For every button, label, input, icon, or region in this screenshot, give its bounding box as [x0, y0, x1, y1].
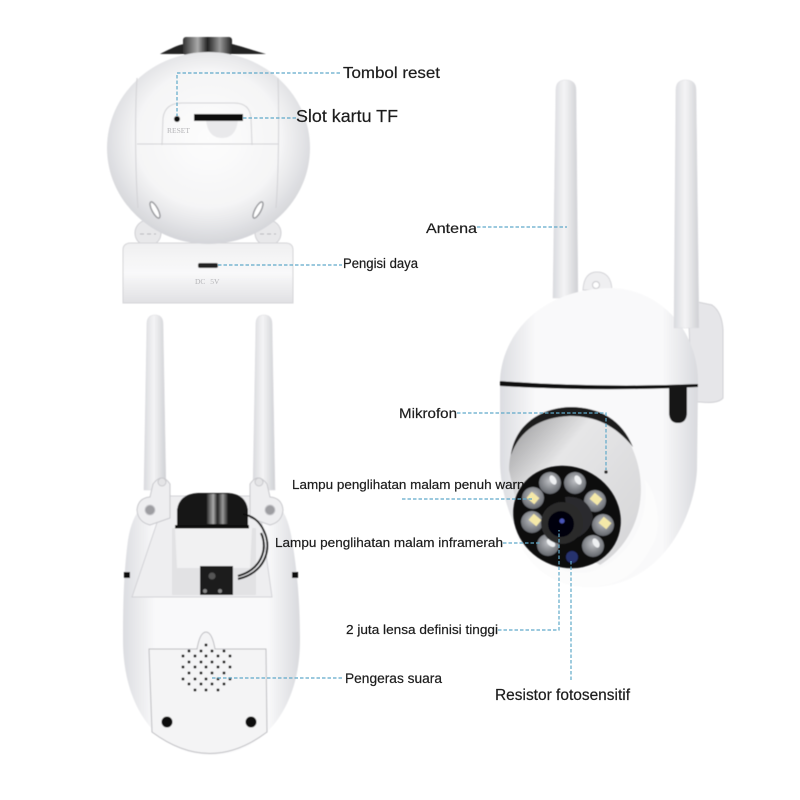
side bracket: [688, 300, 723, 402]
camera: lens face: [494, 446, 640, 588]
cable: [238, 514, 267, 579]
label over housing: full colour night lamp: Lampu penglihatan malam penuh warna: [292, 478, 532, 492]
leader: full colour night lamp: [402, 498, 532, 500]
antenna hinges: [137, 478, 283, 525]
callout: reset button: [177, 65, 441, 116]
lens faceplate: [494, 446, 640, 588]
camera lens: [541, 497, 593, 544]
voltage label: DC 5V: [195, 277, 220, 286]
camera: front housing: [500, 80, 723, 587]
central recess: [132, 496, 272, 597]
charging base: [123, 243, 293, 303]
TF card slot: [194, 114, 243, 121]
gimbal and stem: [175, 493, 252, 568]
gimbal recess: [509, 407, 641, 565]
rotating head highlight: [514, 480, 658, 587]
vent slots: [148, 201, 265, 219]
notch: [669, 386, 687, 423]
right antenna: [674, 80, 699, 328]
speaker holes: [183, 645, 230, 690]
panel seams: [136, 78, 279, 208]
reset hole: [174, 116, 180, 122]
callout: infrared night lamp: Lampu penglihatan malam inframerah: [275, 536, 503, 550]
left antenna: [553, 80, 578, 298]
finger hole: [206, 120, 238, 138]
reset label: RESET: [167, 126, 190, 135]
micro USB port: [198, 263, 218, 268]
callout: speaker: Pengeras suara: [345, 671, 442, 686]
callout: microphone: Mikrofon: [399, 405, 457, 421]
callout: antenna: Antena: [426, 220, 477, 236]
microphone hole: [604, 470, 608, 474]
rear body: [123, 496, 300, 755]
callout: high definition lens: [346, 530, 559, 637]
camera: top rear view: [107, 37, 310, 303]
photoresistor: [566, 551, 578, 563]
hanging hook: [583, 272, 612, 290]
main housing: [500, 288, 698, 587]
speaker hatch: [149, 632, 267, 754]
side marks: [124, 572, 298, 578]
LED lamps: [521, 472, 614, 557]
power module: [200, 566, 233, 595]
recess shadow: [511, 407, 633, 455]
callout: photoresistor: Resistor fotosensitif: [495, 687, 631, 704]
rear antennas: [144, 315, 275, 490]
callout: reset button: Tombol reset: [343, 65, 441, 82]
screws: [162, 716, 256, 728]
lens stem: [160, 37, 266, 55]
infrared LED glints: [545, 474, 601, 549]
callout: TF card slot: Slot kartu TF: [296, 106, 398, 126]
hook hole: [592, 282, 600, 288]
camera: lower rear view: [123, 315, 300, 755]
callout: high definition lens: 2 juta lensa definisi tinggi: [346, 623, 498, 637]
ball housing: [107, 52, 310, 244]
callout: charger port: Pengisi daya: [343, 256, 418, 271]
black band: [500, 381, 698, 389]
mounting feet: [135, 220, 281, 246]
yellow LED chips: [527, 492, 611, 529]
callout: microphone: [399, 405, 606, 470]
